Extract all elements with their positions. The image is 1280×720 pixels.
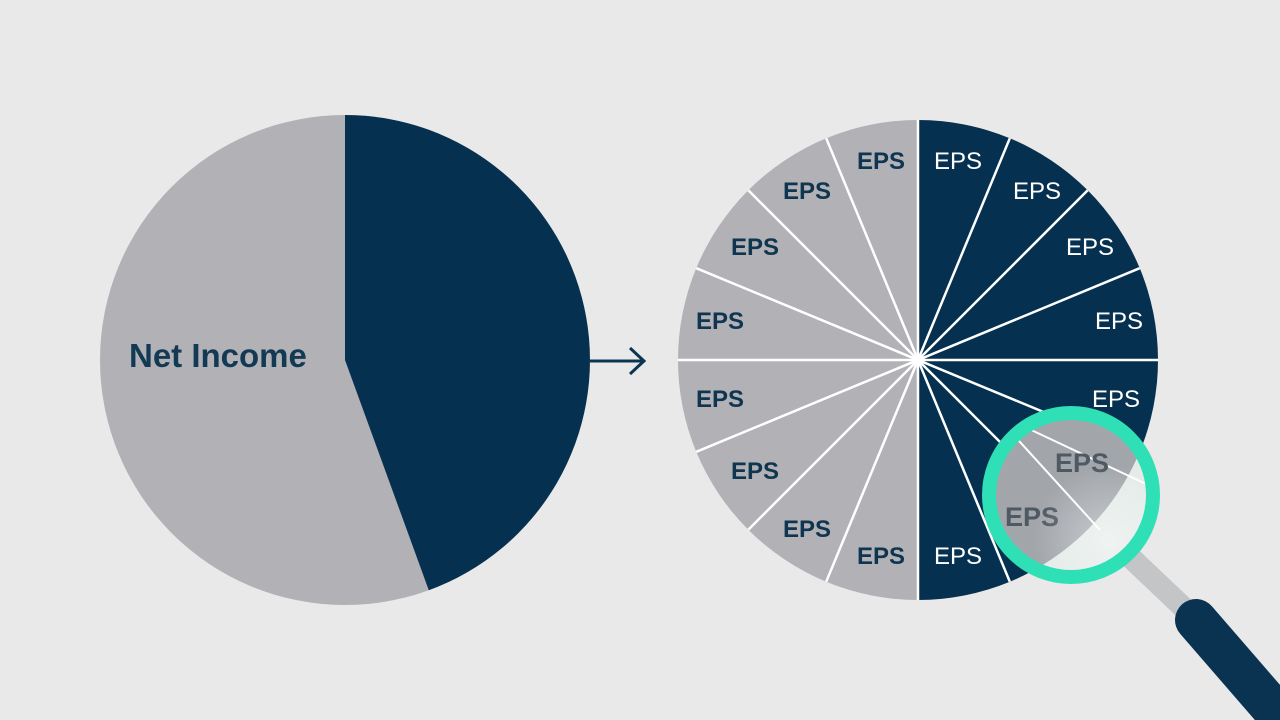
handle [1128, 555, 1188, 612]
right pie chart: EPS slices: EPS [696, 308, 744, 335]
right pie chart: EPS slices: EPS [783, 178, 831, 205]
lens [996, 420, 1146, 565]
right pie chart: EPS slices: EPS [1013, 178, 1061, 205]
arrow [588, 348, 644, 374]
lens: EPS [1005, 502, 1059, 532]
right pie chart: EPS slices: EPS [1095, 308, 1143, 335]
right pie chart: EPS slices [678, 120, 1158, 600]
right pie chart: EPS slices: EPS [857, 148, 905, 175]
right pie chart: EPS slices: EPS [934, 148, 982, 175]
lens: EPS [1055, 448, 1109, 478]
lens ring [989, 413, 1153, 577]
left pie chart: net income [100, 115, 590, 605]
right pie chart: EPS slices: EPS [1092, 386, 1140, 413]
right pie chart: EPS slices: EPS [857, 543, 905, 570]
right pie chart: EPS slices: EPS [783, 516, 831, 543]
right pie chart: EPS slices: EPS [934, 543, 982, 570]
right pie chart: EPS slices: EPS [696, 386, 744, 413]
right pie chart: EPS slices: EPS [731, 458, 779, 485]
right pie chart: EPS slices: EPS [731, 234, 779, 261]
label: Net Income: Net Income [129, 337, 307, 374]
magnifying glass [982, 406, 1280, 720]
right pie chart: EPS slices: EPS [1066, 234, 1114, 261]
